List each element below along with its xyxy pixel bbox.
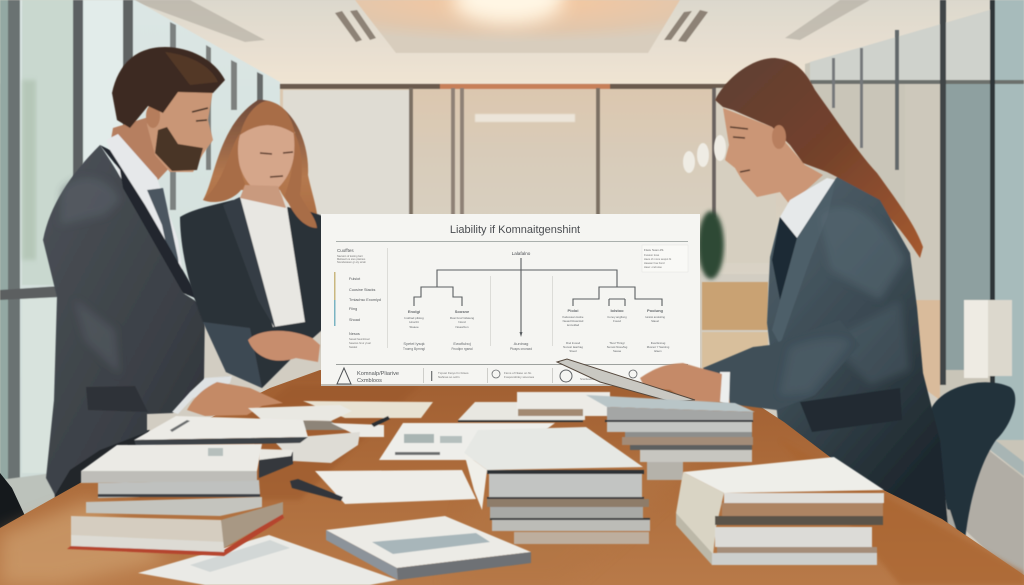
chair: left foreground bbox=[0, 473, 26, 532]
board title: Liability if Komnaitgenshint bbox=[450, 224, 580, 236]
jacket bbox=[767, 177, 948, 525]
right woman's arm and hand bbox=[640, 320, 860, 410]
blouse bbox=[780, 178, 836, 238]
man's face bbox=[147, 90, 213, 172]
board note box: Hasean hoa hond bbox=[644, 261, 665, 265]
jacket highlights bbox=[60, 178, 120, 225]
tree nodes: Inothad pilslog bbox=[404, 316, 424, 320]
tree nodes bbox=[403, 308, 670, 353]
man's neck bbox=[110, 112, 172, 180]
tree root label: Lalafalno bbox=[512, 251, 531, 256]
tree nodes: Tnorng Bprnngl bbox=[403, 347, 425, 351]
board left legend: Cuofftes bbox=[337, 248, 354, 253]
man's eye and brow bbox=[192, 108, 208, 121]
loose sheet bbox=[315, 470, 476, 504]
sheet: top centre bbox=[303, 401, 433, 418]
papers and folders on table bbox=[134, 392, 610, 585]
tree nodes: Pioloi bbox=[568, 308, 578, 313]
board left legend: Cuosine Stacks bbox=[349, 288, 375, 292]
chart sheet bbox=[379, 423, 555, 460]
board note box bbox=[642, 245, 688, 272]
tree nodes: Slaoel bbox=[651, 319, 659, 323]
office chair bbox=[932, 382, 1015, 540]
board footer strip: Txpust Fssys hn bitsos bbox=[438, 371, 469, 375]
man's ear bbox=[146, 104, 160, 128]
woman's hair back bbox=[203, 100, 318, 228]
open binder bbox=[134, 416, 308, 440]
side cabinet bbox=[702, 282, 768, 372]
person: woman on the right bbox=[715, 58, 1015, 540]
woman's eyes and mouth bbox=[260, 152, 293, 177]
person: woman behind bbox=[180, 100, 322, 388]
tree nodes: Enolgi bbox=[408, 309, 420, 314]
tree nodes: Tlusl Thnigr bbox=[609, 341, 625, 345]
tree nodes: Sasoa bbox=[613, 349, 621, 353]
board footer strip: Fions of Niaso on flo bbox=[504, 371, 532, 375]
board footer strip: Cxmbloos bbox=[357, 378, 382, 384]
board left legend: Fiing bbox=[349, 307, 357, 311]
book stack: right bbox=[676, 457, 884, 565]
book stack: back centre-right bbox=[586, 395, 755, 480]
red bottom book bbox=[67, 513, 284, 556]
right window wall bbox=[805, 0, 1024, 585]
table bbox=[0, 370, 1024, 585]
ear bbox=[772, 125, 786, 149]
tree nodes: Sunust Nsso/fag bbox=[607, 345, 628, 349]
tree nodes: Iennoldad bbox=[567, 323, 580, 327]
tree nodes: Nond bbox=[458, 320, 466, 324]
eye and brow bbox=[730, 127, 750, 172]
man's jacket bbox=[43, 145, 230, 495]
tree diagram bbox=[414, 258, 662, 334]
tree nodes: Sloaoe bbox=[409, 325, 419, 329]
board left legend bbox=[334, 248, 381, 349]
tree nodes: Ifnel lnosod bbox=[566, 341, 581, 345]
woman's jacket bbox=[180, 200, 322, 388]
small folders top bbox=[458, 402, 585, 420]
tree nodes: Iolstoo bbox=[610, 308, 624, 313]
tree nodes: Iunsisi anololing bbox=[645, 315, 665, 319]
tree nodes: Poolung bbox=[647, 308, 664, 313]
board footer strip bbox=[321, 364, 700, 386]
clipboard book bbox=[326, 516, 531, 580]
ceiling with warm glow bbox=[0, 0, 1024, 84]
book stack: centre bbox=[464, 427, 650, 544]
tree nodes: Kalsoxsan loslne bbox=[562, 315, 584, 319]
board left legend: Shoad bbox=[349, 318, 360, 322]
booklet below binder bbox=[272, 432, 360, 463]
man's beard bbox=[155, 127, 203, 171]
board left legend: Tmiachsc Exomlyd bbox=[349, 298, 381, 302]
small paper with pen bbox=[331, 423, 384, 437]
board note box: Fiscu Susn dS bbox=[644, 248, 663, 252]
man's arm and hand on table bbox=[172, 376, 283, 416]
woman's sleeve bbox=[203, 322, 262, 388]
woman's hands bbox=[248, 331, 320, 362]
tree nodes: Ptusps cnoraxd bbox=[510, 347, 532, 351]
presentation board bbox=[321, 214, 700, 386]
board footer strip: Srwilsodtdan bbox=[580, 377, 598, 381]
tree nodes: Syetel lysqk bbox=[403, 341, 425, 346]
board left legend: Mebascl os siuo plaintes bbox=[337, 257, 366, 261]
board left legend: Siwalel bbox=[349, 345, 358, 349]
board left legend: Nacsion of lesting bart bbox=[337, 254, 363, 258]
board left legend: Nesos bbox=[349, 332, 360, 336]
board footer strip: Nahnas so sofin bbox=[438, 375, 460, 379]
long hair bbox=[715, 58, 923, 258]
tree nodes: Soosne bbox=[455, 309, 470, 314]
board left legend: Nonslwsteen gr ety sicali bbox=[337, 260, 366, 264]
tree nodes: Iliual Ennag bbox=[651, 341, 666, 345]
tree nodes: Nunust Iaanhag bbox=[563, 345, 583, 349]
board note box: Fsosion ticas bbox=[644, 253, 660, 257]
jacket lapel bbox=[772, 178, 836, 345]
left window wall bbox=[0, 0, 280, 530]
man's shirt and tie bbox=[106, 134, 186, 295]
woman's face bbox=[236, 125, 295, 193]
tree nodes: Musnot Y Sanslng bbox=[647, 345, 670, 349]
tree nodes: Auninag bbox=[514, 341, 528, 346]
board note box: Haso: oncinose bbox=[644, 265, 662, 269]
back wall panels bbox=[270, 84, 820, 274]
tree nodes: Sloed bbox=[569, 349, 577, 353]
board note box: Haos of mons sespot bt bbox=[644, 257, 672, 261]
plant bbox=[698, 211, 724, 279]
tablet held by right woman bbox=[557, 359, 695, 402]
board footer strip: Komnalp/Pliarive bbox=[357, 371, 399, 377]
jacket folds bbox=[820, 207, 905, 300]
tree nodes: Fosod bbox=[613, 319, 621, 323]
sheet bottom bbox=[138, 535, 397, 585]
book stack: left bbox=[67, 444, 284, 556]
tree nodes: Ewofluboj bbox=[453, 341, 471, 346]
tree nodes: Elaon bbox=[654, 349, 662, 353]
tree nodes: Fnodipn rgseal bbox=[451, 347, 473, 351]
board left legend: Sesad haumlinoel bbox=[349, 337, 370, 341]
pen bbox=[290, 479, 343, 501]
pendant lights bbox=[683, 135, 726, 173]
tree nodes: Rosi bnof Gilawng bbox=[450, 316, 474, 320]
tree nodes: Conoy angllong bbox=[607, 315, 627, 319]
man's trousers bbox=[52, 430, 150, 500]
board left legend: Fulsiot bbox=[349, 277, 361, 281]
woman's blouse bbox=[240, 197, 305, 327]
tree nodes: Neasd Roasntsd bbox=[563, 319, 584, 323]
jacket lapel shadow bbox=[100, 145, 200, 300]
small stack beside bbox=[259, 451, 293, 478]
woman's lapel bbox=[223, 197, 276, 330]
woman's hair front bbox=[203, 101, 317, 228]
tree nodes: Hnarzit bbox=[409, 320, 419, 324]
binder: near left hand bbox=[248, 405, 352, 421]
neck and face bbox=[723, 108, 823, 205]
person: man on the left bbox=[43, 47, 230, 500]
board left legend: Seaowo hnur yrual bbox=[349, 341, 371, 345]
board footer strip: Fosponsbiloy siooxses bbox=[504, 375, 535, 379]
man's hair bbox=[112, 47, 225, 128]
tree nodes: Noaorlton bbox=[455, 325, 469, 329]
